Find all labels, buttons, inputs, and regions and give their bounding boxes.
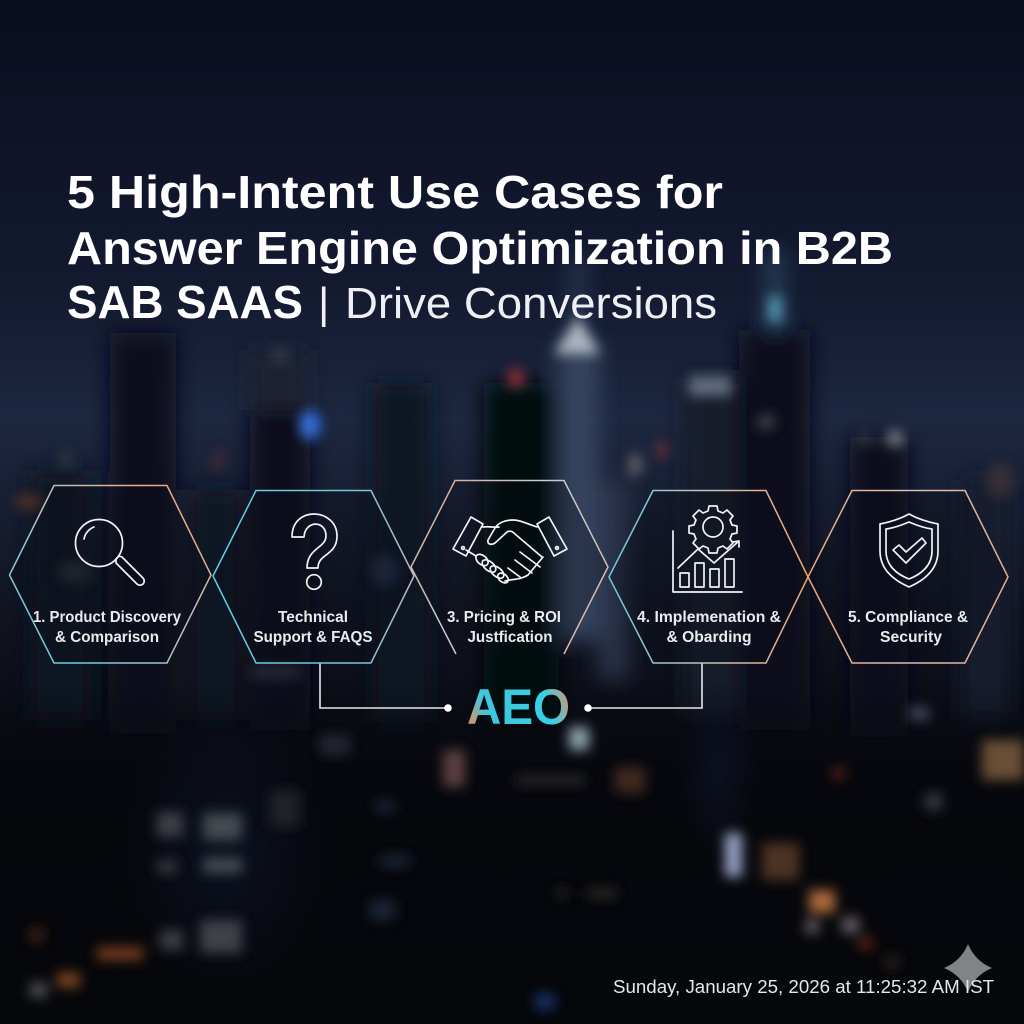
panel: use case 2 technical support [213,490,414,663]
label: technical support: Support & FAQS [254,629,372,646]
label: pricing and ROI: Justfication [468,629,552,646]
icon: sparkle watermark [944,944,992,992]
title: Drive Conversions [345,279,717,328]
icon: gear and growth chart [673,506,742,592]
icon: handshake [453,517,567,585]
title: 5 High-Intent Use Cases for [67,166,723,218]
timestamp: Sunday, January 25, 2026 at 11:25:32 AM IST [613,977,994,997]
panel: use case 3 pricing and ROI [411,480,608,654]
title: Answer Engine Optimization in B2B [67,222,893,274]
icon: question mark [292,514,337,589]
label: implementation: 4. Implemenation & [637,609,781,626]
label: product discovery: & Comparison [55,629,159,646]
title: SAB SAAS [67,276,303,328]
label: compliance: Security [880,629,942,646]
label: technical support: Technical [278,609,348,626]
label: implementation: & Obarding [666,629,752,646]
label: compliance: 5. Compliance & [848,609,968,626]
panel: use case 4 implementation [609,490,808,663]
label: product discovery: 1. Product Discovery [33,609,181,626]
panel: use case 1 product discovery [10,486,211,663]
icon: magnifying glass [76,520,144,585]
icon: shield with check [880,514,938,587]
panel: use case 5 compliance [808,490,1008,663]
title [67,166,893,328]
logo: AEO: AEO [467,679,570,735]
title: | [318,279,329,328]
label: pricing and ROI: 3. Pricing & ROI [447,609,561,626]
connector lines to AEO logo [320,663,702,712]
